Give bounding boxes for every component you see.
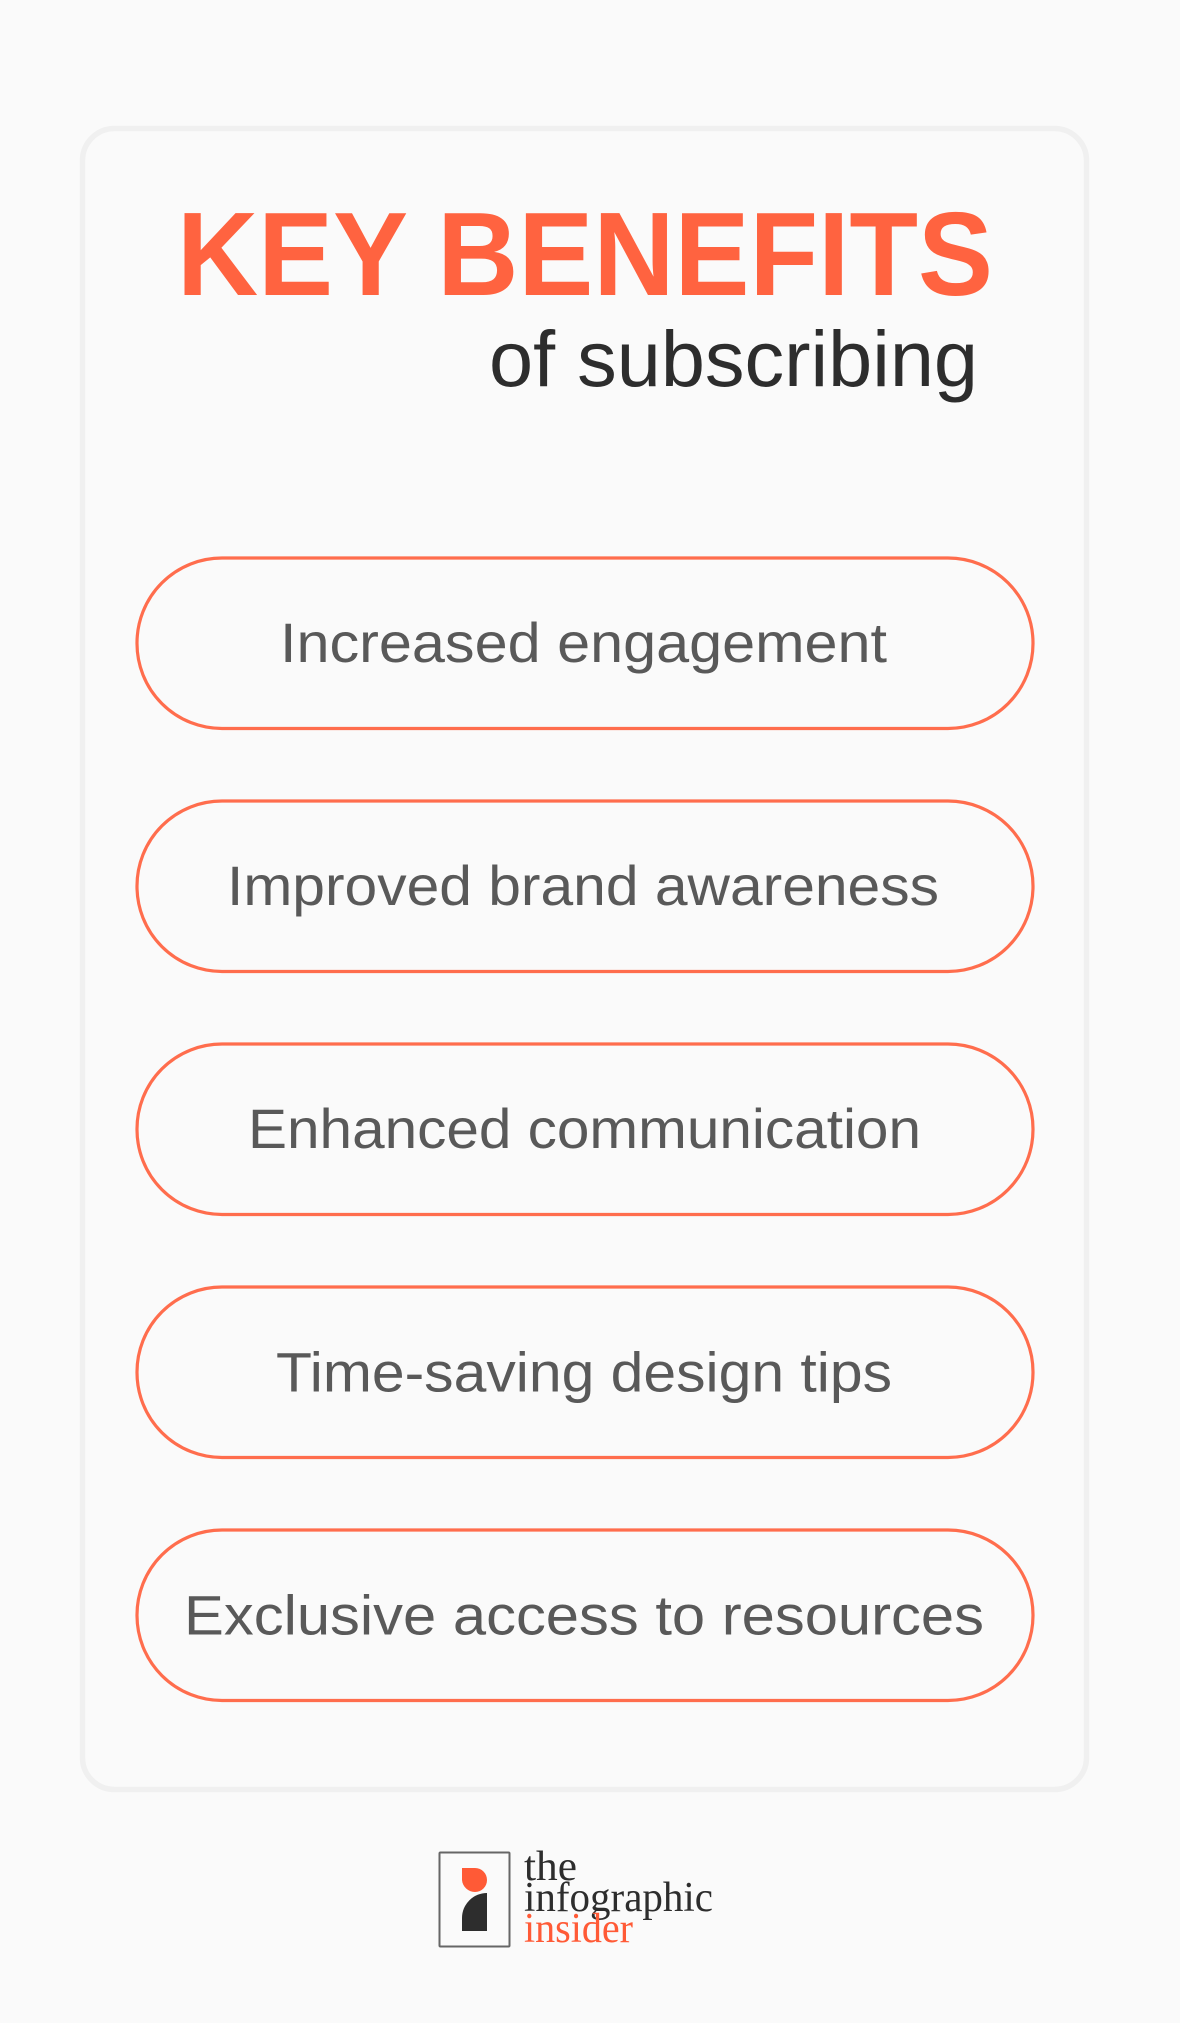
benefit pill: improved brand awareness: Improved brand awareness — [227, 854, 939, 917]
logo wordmark: insider — [524, 1906, 633, 1952]
benefit pill: enhanced communication — [137, 1044, 1033, 1214]
title: KEY BENEFITS — [177, 188, 993, 321]
benefit pill: enhanced communication: Enhanced communication — [248, 1097, 921, 1160]
icon: logo mark — [440, 1852, 510, 1946]
benefit pill: exclusive access to resources — [137, 1530, 1033, 1700]
subtitle: of subscribing — [489, 314, 978, 403]
logo wordmark: the — [524, 1844, 577, 1890]
benefit pill: time-saving design tips — [137, 1287, 1033, 1458]
benefit pill: time-saving design tips: Time-saving design tips — [276, 1340, 892, 1404]
panel: card outline — [82, 128, 1086, 1790]
logo: the infographic insider — [440, 1844, 713, 1952]
logo wordmark — [524, 1844, 713, 1952]
benefit pill: exclusive access to resources: Exclusive access to resources — [184, 1584, 984, 1646]
benefit pill: increased engagement — [137, 558, 1033, 728]
logo wordmark: infographic — [524, 1875, 713, 1921]
benefit pill: improved brand awareness — [137, 801, 1033, 972]
benefit pill: increased engagement: Increased engagement — [280, 611, 887, 674]
